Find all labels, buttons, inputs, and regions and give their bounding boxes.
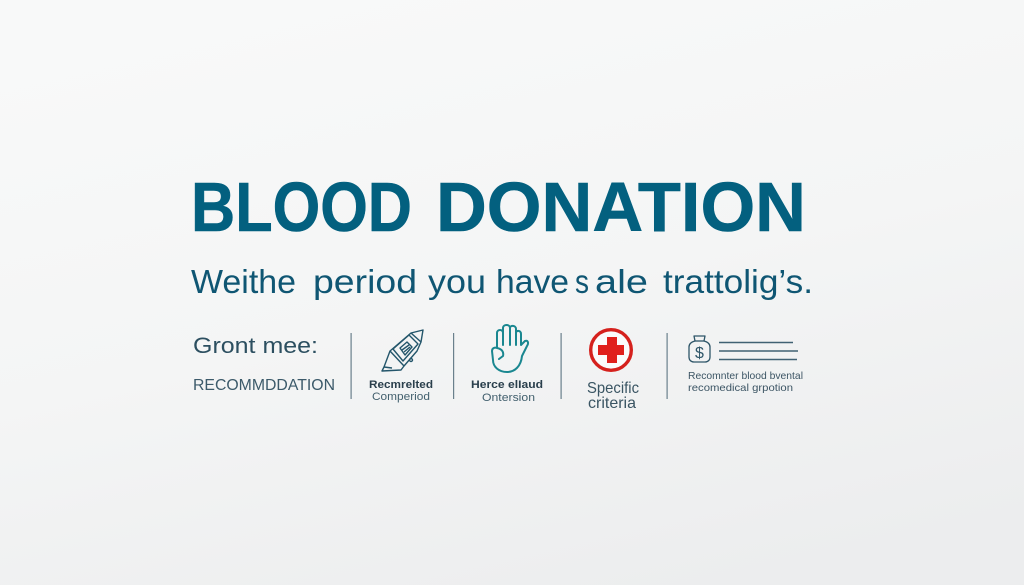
label: line 2: recomedical grpotion — [688, 382, 793, 394]
icon: capsule — [382, 330, 423, 371]
item: specific criteria — [587, 330, 639, 412]
label: heading: Gront mee: — [193, 333, 318, 358]
title: BLOOD — [191, 168, 412, 246]
title: DONATION — [436, 168, 806, 246]
icon: text lines — [719, 342, 798, 360]
icon: red cross — [591, 330, 631, 370]
subtitle: Weithe — [191, 263, 296, 300]
label: line 2: criteria — [588, 395, 636, 412]
label: line 1: Specific — [587, 380, 639, 397]
subtitle — [191, 263, 813, 300]
label: recommendation: RECOMMDDATION — [193, 377, 335, 394]
item: recommendation note — [688, 336, 803, 394]
subtitle: you — [428, 263, 486, 300]
left label block — [193, 333, 335, 394]
icon: dollar: $ — [695, 345, 704, 362]
label: bold: Herce elIaud — [471, 379, 543, 391]
icon: money bag — [689, 336, 710, 362]
divider 3 — [560, 333, 562, 399]
label: regular: Ontersion — [482, 392, 535, 404]
label: regular: Comperiod — [372, 391, 430, 403]
icon: hand — [492, 325, 528, 372]
divider 4 — [666, 333, 668, 399]
subtitle: s — [575, 263, 589, 300]
subtitle: ale — [595, 263, 648, 300]
subtitle: trattolig’s. — [663, 263, 813, 300]
subtitle: period — [313, 263, 417, 300]
divider 2 — [453, 333, 454, 399]
title — [191, 168, 806, 246]
subtitle: have — [496, 263, 569, 300]
label: line 1: Recomnter blood bvental — [688, 370, 803, 382]
item: compared — [369, 330, 433, 403]
item: hand — [471, 325, 543, 404]
divider 1 — [350, 333, 352, 399]
label: bold: Recmrelted — [369, 379, 433, 391]
